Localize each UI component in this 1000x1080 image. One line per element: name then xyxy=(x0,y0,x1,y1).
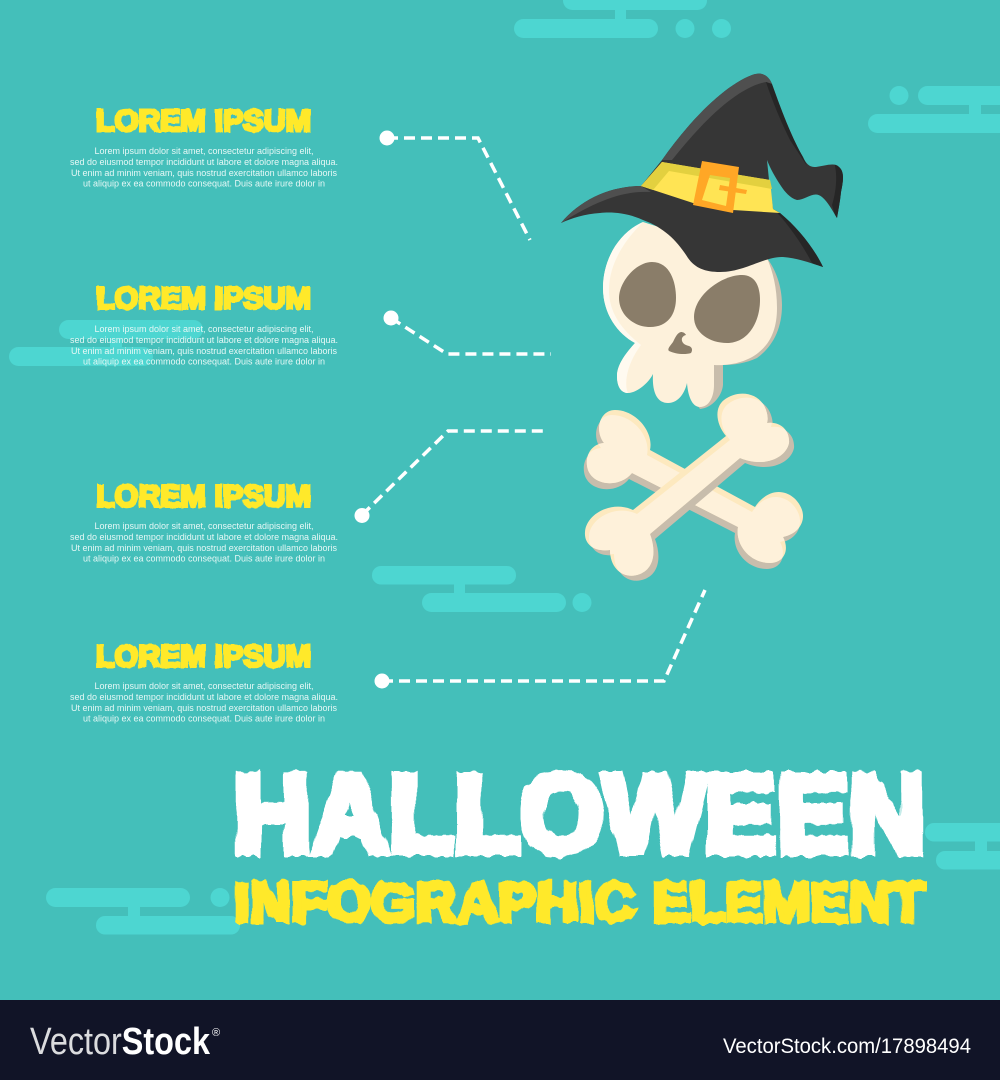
skull xyxy=(603,222,782,409)
hat band shade xyxy=(641,162,772,190)
front bone xyxy=(585,394,794,581)
buckle pin xyxy=(719,185,747,194)
text block: item 4: Lorem ipsum dolor sit amet, consectetur adipiscing elit, xyxy=(94,681,314,691)
text block: item 4: sed do eiusmod tempor incididunt ut labore et dolore magna aliqua. xyxy=(70,692,338,702)
text block: item 2: ut aliquip ex ea commodo consequat. Duis aute irure dolor in xyxy=(83,356,325,366)
hat dark edge xyxy=(766,82,848,270)
text block: item 3: Ut enim ad minim veniam, quis nostrud exercitation ullamco laboris xyxy=(71,543,338,553)
witch hat xyxy=(561,74,848,272)
panel: item 2 xyxy=(70,280,338,366)
hat band xyxy=(641,162,780,213)
text block: item 3: sed do eiusmod tempor incididunt ut labore et dolore magna aliqua. xyxy=(70,532,338,542)
footer logo: VectorStock xyxy=(30,1021,211,1063)
connector 2 xyxy=(384,310,551,354)
text block: item 2 xyxy=(70,324,338,366)
text block: item 3: Lorem ipsum dolor sit amet, consectetur adipiscing elit, xyxy=(94,521,314,531)
text block: item 2: Lorem ipsum dolor sit amet, consectetur adipiscing elit, xyxy=(94,324,314,334)
back bone xyxy=(584,410,803,569)
connector 3 xyxy=(354,431,543,523)
buckle xyxy=(693,161,739,213)
registered mark: ® xyxy=(212,1027,220,1039)
panel: item 3 xyxy=(70,478,338,564)
hat light edge xyxy=(561,74,772,223)
connector 4 xyxy=(374,590,705,688)
text block: item 2: Ut enim ad minim veniam, quis nostrud exercitation ullamco laboris xyxy=(71,346,338,356)
cloud: middle left xyxy=(9,320,203,366)
cloud: top centre xyxy=(514,0,731,38)
heading: item 4: LOREM IPSUM xyxy=(96,638,311,674)
nose xyxy=(668,332,692,354)
text block: item 3 xyxy=(70,521,338,564)
cloud: top right xyxy=(868,86,1000,133)
panel: item 4 xyxy=(70,638,338,724)
text block: item 1: Lorem ipsum dolor sit amet, consectetur adipiscing elit, xyxy=(94,146,314,156)
text block: item 1 xyxy=(70,146,338,188)
connector 1 xyxy=(380,130,530,240)
heading: item 3: LOREM IPSUM xyxy=(96,478,311,514)
heading: item 1: LOREM IPSUM xyxy=(96,103,311,138)
text block: item 3: ut aliquip ex ea commodo consequat. Duis aute irure dolor in xyxy=(83,554,325,564)
text block: item 2: sed do eiusmod tempor incididunt ut labore et dolore magna aliqua. xyxy=(70,335,338,345)
right eye xyxy=(694,275,760,343)
illustration: crossed bones xyxy=(584,394,803,581)
cloud: bottom right xyxy=(925,823,1000,870)
footer url: VectorStock.com/17898494 xyxy=(723,1035,971,1058)
text block: item 4 xyxy=(70,681,338,724)
subtitle: Infographic Element: INFOGRAPHIC ELEMENT xyxy=(234,871,925,933)
text block: item 4: ut aliquip ex ea commodo consequat. Duis aute irure dolor in xyxy=(83,714,325,724)
text block: item 1: sed do eiusmod tempor incididunt ut labore et dolore magna aliqua. xyxy=(70,157,338,167)
cloud: centre xyxy=(372,566,592,612)
left eye xyxy=(619,262,676,327)
cloud: bottom left xyxy=(46,888,240,934)
heading: item 2: LOREM IPSUM xyxy=(96,280,311,316)
text block: item 1: ut aliquip ex ea commodo consequat. Duis aute irure dolor in xyxy=(83,178,325,188)
title: Halloween: HALLOWEEN xyxy=(234,753,926,876)
text block: item 1: Ut enim ad minim veniam, quis nostrud exercitation ullamco laboris xyxy=(71,168,338,178)
footer bar xyxy=(0,1000,1000,1080)
panel: item 1 xyxy=(70,103,338,188)
illustration: skull with witch hat xyxy=(561,74,848,409)
text block: item 4: Ut enim ad minim veniam, quis nostrud exercitation ullamco laboris xyxy=(71,703,338,713)
